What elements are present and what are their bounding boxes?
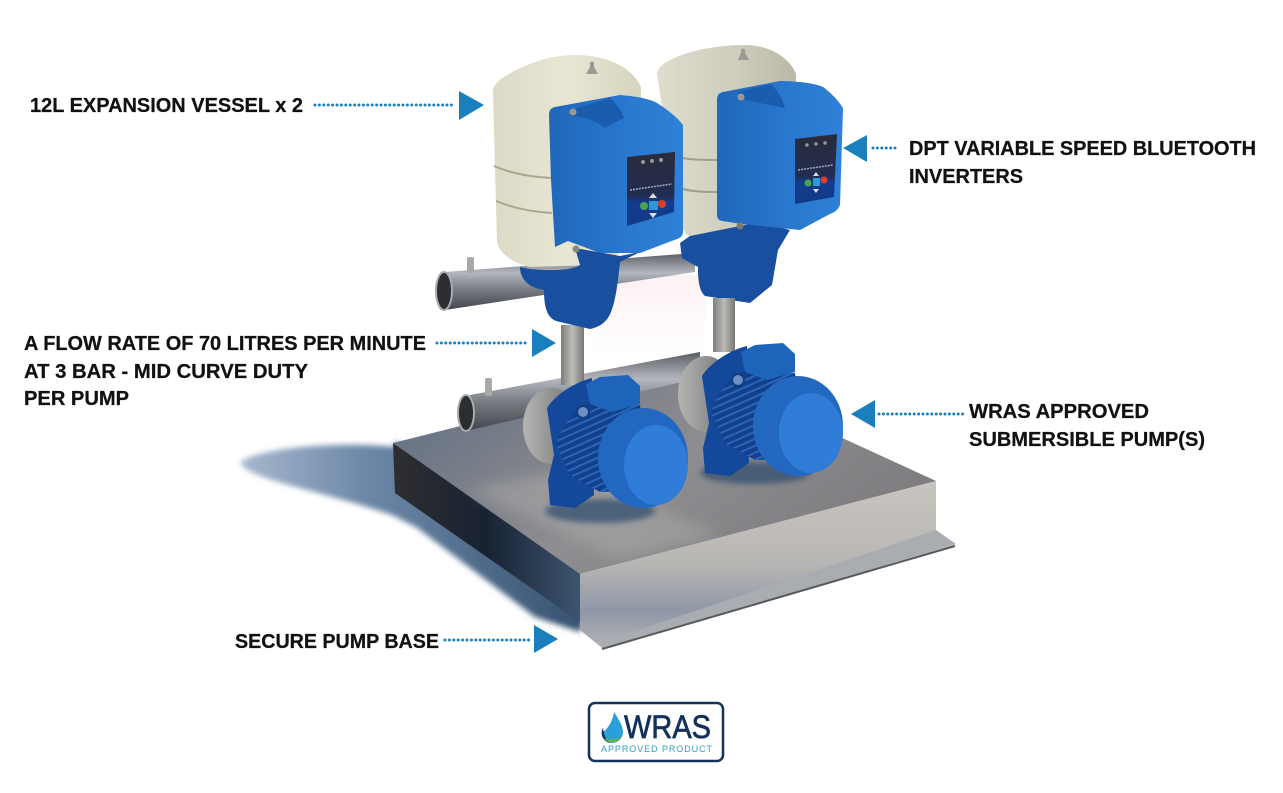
left inverter [520, 95, 683, 329]
WRAS logo [589, 703, 723, 761]
right expansion vessel [657, 45, 796, 245]
base inner left wall [393, 443, 580, 622]
callout: flow rate [24, 329, 556, 410]
WRAS logo: APPROVED PRODUCT [601, 744, 712, 754]
callout: expansion vessel: 12L EXPANSION VESSEL x 2 [30, 95, 303, 117]
left riser [561, 325, 584, 385]
left pump motor [523, 375, 688, 514]
callout: flow rate: PER PUMP [24, 388, 129, 410]
left control panel [627, 152, 675, 226]
right pump motor [678, 343, 843, 482]
callout: flow rate: AT 3 BAR - MID CURVE DUTY [24, 361, 309, 383]
base flange edge [602, 546, 955, 649]
callout: expansion vessel [30, 91, 484, 120]
background glow behind pipes [590, 275, 705, 355]
right riser [713, 298, 735, 352]
callout: inverters: DPT VARIABLE SPEED BLUETOOTH [909, 138, 1256, 160]
left inverter mount [520, 248, 640, 329]
pump base [393, 368, 956, 649]
left motor shadow [545, 499, 655, 523]
callout: pump base: SECURE PUMP BASE [235, 631, 439, 653]
left expansion vessel [493, 55, 641, 267]
callout: flow rate: A FLOW RATE OF 70 LITRES PER MINUTE [24, 333, 426, 355]
icon: water drop [602, 712, 623, 743]
WRAS logo: WRAS [624, 709, 711, 745]
callout: submersible pumps: SUBMERSIBLE PUMP(S) [969, 429, 1205, 451]
base flange [600, 530, 956, 648]
base top plate [393, 368, 936, 574]
base front wall [580, 481, 955, 648]
shadow on ground [240, 440, 590, 632]
callout: pump base [235, 625, 558, 653]
lower pipe [458, 352, 700, 431]
base highlights [470, 470, 720, 560]
callout: inverters: INVERTERS [909, 166, 1023, 188]
callout: submersible pumps [851, 400, 1205, 451]
upper pipe [436, 253, 695, 310]
callout: inverters [843, 135, 1256, 188]
right control panel [795, 134, 837, 204]
right motor shadow [700, 462, 810, 484]
right inverter [680, 81, 843, 303]
right inverter mount [680, 222, 790, 303]
callout: submersible pumps: WRAS APPROVED [969, 401, 1149, 423]
